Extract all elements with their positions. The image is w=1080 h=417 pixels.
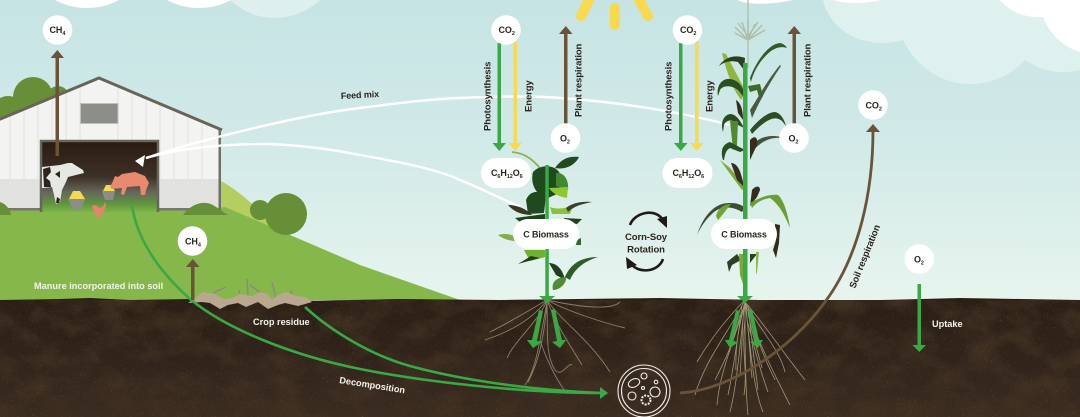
label bubble: O2 corn: 2	[795, 140, 798, 146]
icon: feed buckets	[68, 185, 115, 210]
label bubble: glucose soybean: H	[500, 168, 507, 178]
label: energy corn: Energy	[704, 80, 716, 112]
soybean stem arrow	[527, 165, 566, 348]
label bubble: CH4 barn: 4	[62, 31, 66, 37]
label bubble: glucose soybean: 12	[507, 174, 513, 180]
sky background	[0, 0, 1080, 305]
label bubble: CO2 soybean: CO	[498, 25, 512, 35]
label bubble: O2 soybean: 2	[567, 140, 570, 146]
label bubble: CO2 corn: CO	[680, 25, 693, 35]
soil	[0, 298, 1080, 417]
label: crop residue: Crop residue	[253, 317, 310, 327]
icon: rotation arrows	[626, 213, 667, 270]
label: photosynthesis soybean: Photosynthesis	[482, 62, 494, 131]
label bubble: CO2 corn: 2	[693, 31, 696, 37]
label bubble: glucose soybean: O	[513, 168, 520, 178]
label bubble: O2 corn	[779, 123, 809, 153]
crop residue	[188, 279, 312, 309]
label bubble: CO2 soybean	[491, 15, 521, 45]
label bubble: O2 soybean	[551, 123, 580, 153]
label bubble: glucose corn	[662, 158, 712, 188]
label: plant respiration corn: Plant respiration	[802, 43, 814, 117]
clouds	[19, 0, 1080, 84]
soybean energy arrow	[508, 41, 522, 151]
label bubble: CH4 residue: CH	[185, 236, 198, 246]
label bubble: CO2 corn	[673, 15, 702, 45]
icon: pig	[110, 172, 149, 195]
barn door opening	[41, 141, 158, 212]
label bubble: CH4 barn	[43, 15, 72, 45]
bushes in front of barn	[0, 202, 228, 215]
label bubble: CH4 residue: 4	[198, 242, 202, 248]
arrow: soil respiration	[680, 124, 880, 393]
corn plant respiration arrow	[788, 26, 801, 125]
label bubble: glucose corn: 6	[701, 174, 704, 180]
feed mix arrows	[135, 96, 730, 207]
label: photosynthesis corn: Photosynthesis	[664, 62, 674, 131]
corn photosynthesis arrow	[674, 43, 688, 151]
label bubble: glucose corn: C	[672, 168, 679, 178]
label bubble: O2 corn: O	[788, 134, 795, 144]
label bubble: C biomass soybean: C Biomass	[523, 230, 569, 240]
label: soil respiration: Soil respiration	[848, 223, 883, 290]
label bubble: CH4 residue	[178, 226, 207, 256]
label bubble: glucose soybean: 6	[497, 174, 500, 180]
label bubble: CO2 soybean: 2	[512, 31, 515, 37]
label bubble: O2 soil: 2	[921, 260, 924, 266]
label bubble: O2 soil: O	[914, 254, 921, 264]
barn vent	[80, 104, 118, 124]
label bubble: C biomass corn: C Biomass	[721, 230, 767, 240]
label bubble: CO2 soil: 2	[879, 106, 882, 112]
soybean photosynthesis arrow	[492, 43, 506, 151]
label bubble: glucose soybean	[481, 158, 531, 188]
corn plant	[697, 0, 790, 290]
label bubble: glucose soybean: 6	[520, 174, 523, 180]
label bubble: C biomass soybean	[513, 219, 579, 249]
label: uptake: Uptake	[932, 319, 963, 329]
icon: chicken	[92, 202, 106, 219]
label: corn-soy rotation: Corn-Soy	[625, 232, 667, 243]
barn	[0, 78, 222, 212]
label bubble: CO2 soil: CO	[866, 100, 879, 110]
soybean roots	[485, 300, 625, 392]
label: corn-soy rotation: Rotation	[627, 244, 665, 256]
icon: sun rays	[581, 0, 648, 25]
label bubble: glucose corn: 12	[688, 174, 694, 180]
arrow: oxygen uptake	[912, 284, 926, 352]
label bubble: glucose soybean: C	[491, 168, 497, 178]
label: energy soybean: Energy	[524, 80, 534, 112]
label: manure incorporated into soil: Manure incorporated into soil	[34, 281, 163, 291]
corn energy arrow	[690, 41, 704, 151]
soybean plant respiration arrow	[559, 26, 572, 125]
label: feed mix: Feed mix	[341, 89, 379, 101]
label bubble: glucose corn: O	[694, 168, 701, 178]
label bubble: C biomass corn	[711, 219, 777, 249]
label: plant respiration soybean: Plant respiration	[574, 43, 584, 117]
label bubble: CO2 soil	[858, 90, 888, 120]
icon: cow	[42, 163, 84, 204]
hills and bushes	[0, 77, 460, 300]
icon: CH4 arrow from residue	[186, 259, 200, 300]
corn stem arrow	[725, 63, 763, 348]
label bubble: glucose corn: 6	[679, 174, 682, 180]
arrow: manure and crop residue decomposition	[132, 205, 608, 399]
icon: CH4 arrow from barn	[51, 50, 64, 156]
label bubble: O2 soybean: O	[560, 134, 567, 144]
label bubble: glucose corn: H	[682, 168, 688, 178]
label bubble: O2 soil	[904, 244, 934, 274]
label: decomposition: Decomposition	[339, 375, 406, 395]
corn roots	[695, 300, 805, 415]
label bubble: CH4 barn: CH	[50, 25, 62, 35]
soybean plant	[498, 152, 598, 290]
icon: microbes	[618, 365, 670, 417]
